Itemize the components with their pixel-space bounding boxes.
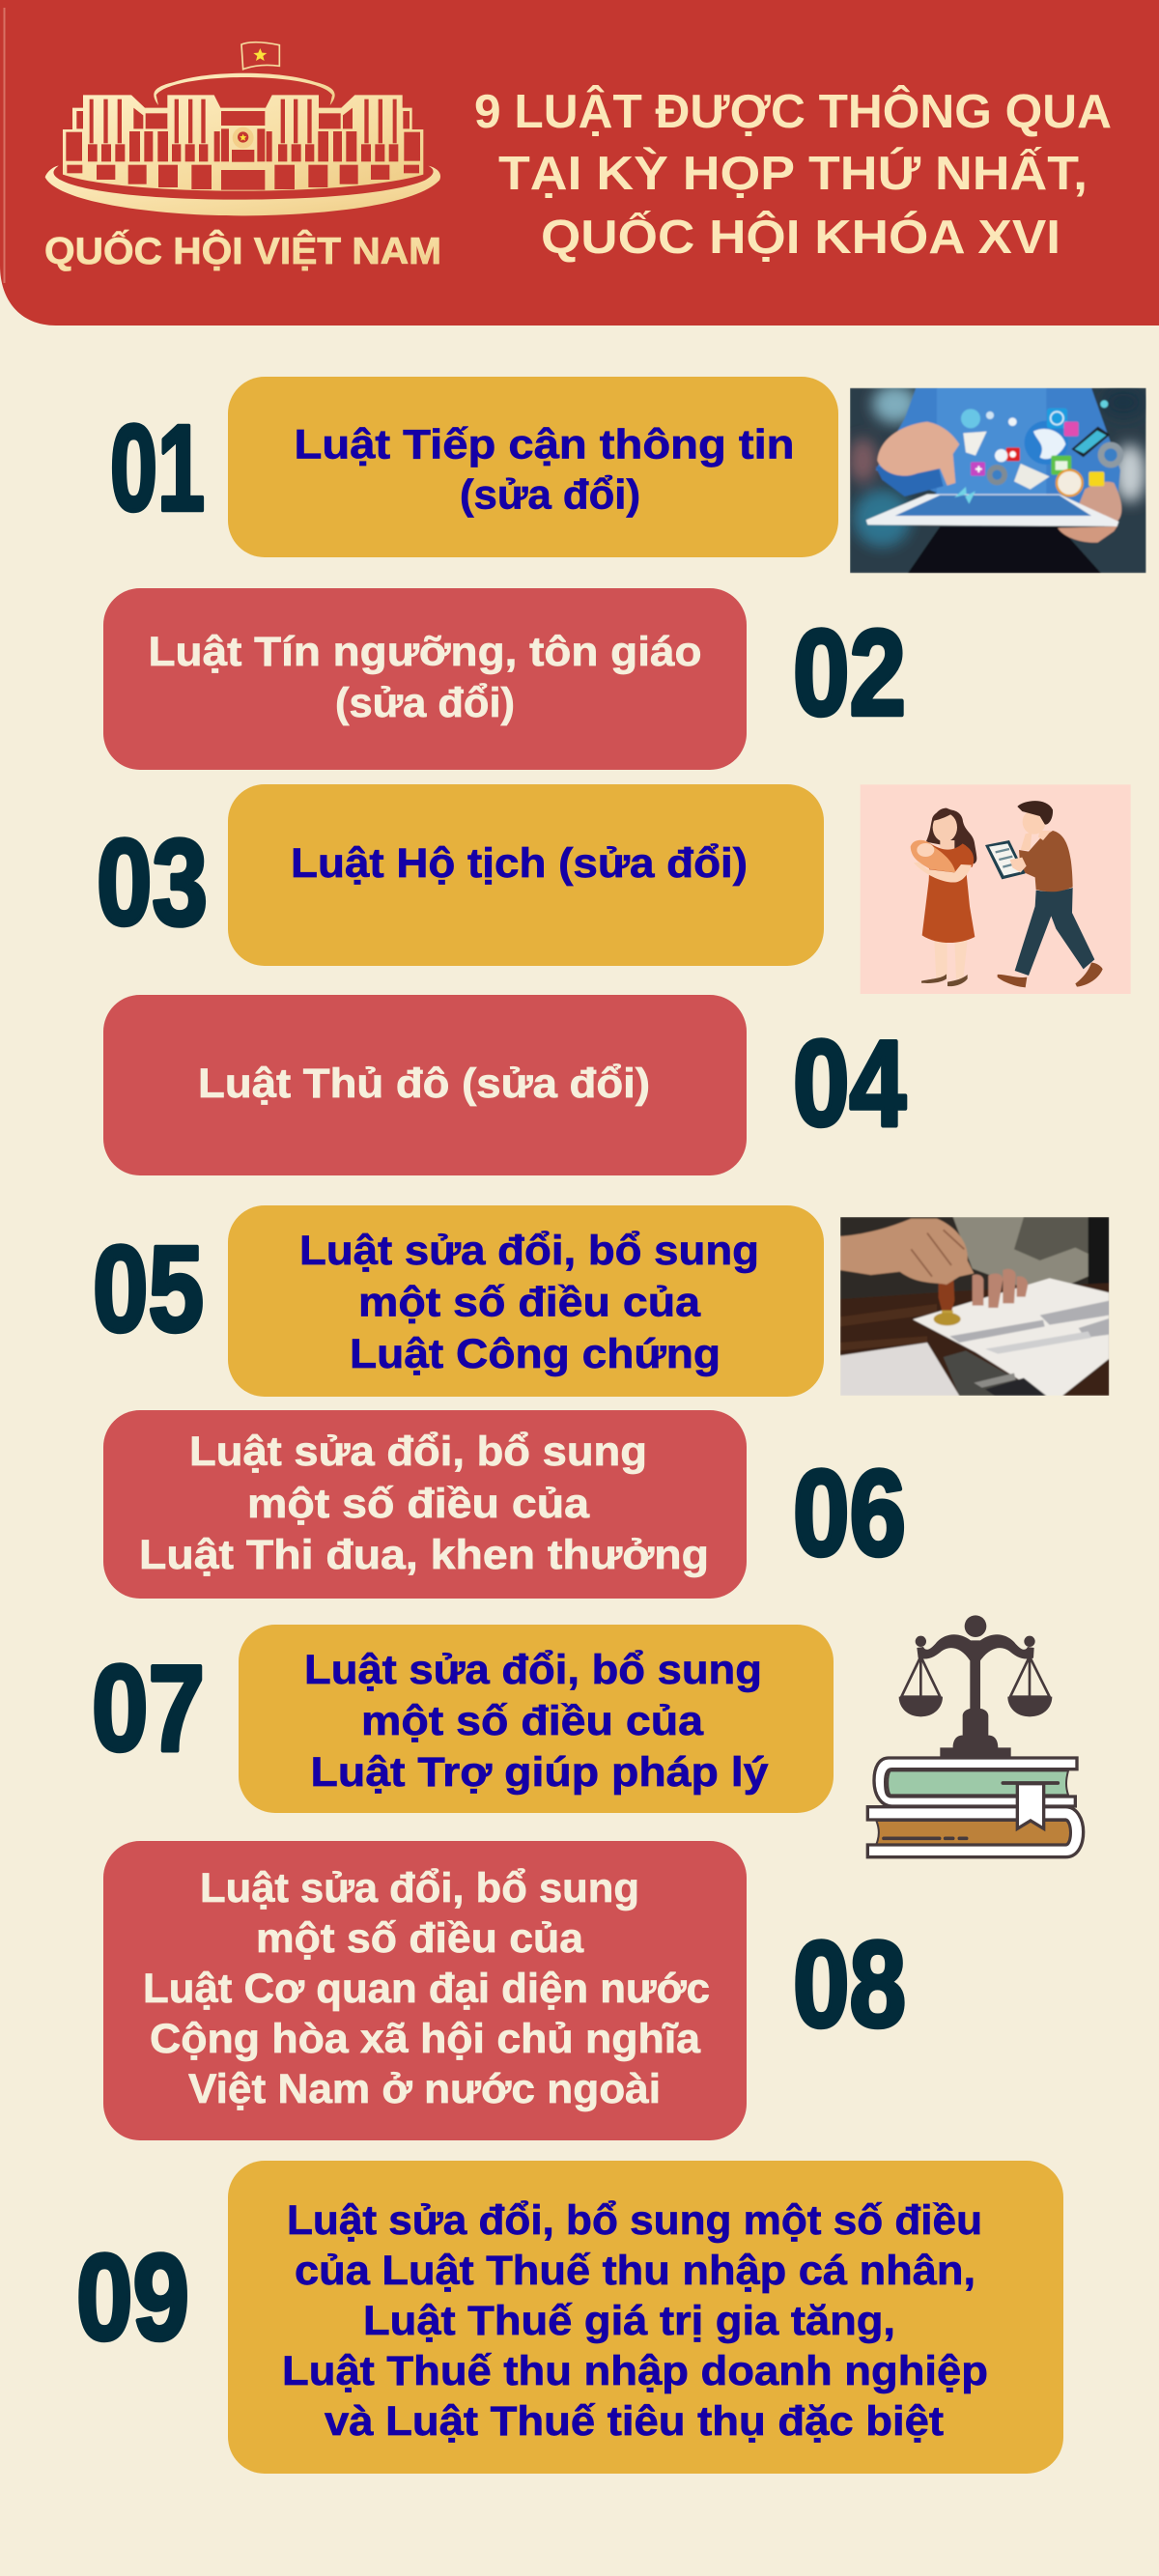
title: 9 LUẬT ĐƯỢC THÔNG QUA [474,85,1112,138]
number 05: 05 [93,1221,204,1357]
number 07: 07 [92,1640,205,1776]
panel: law 04 [103,995,747,1175]
panel: law 01: (sửa đổi) [460,471,640,518]
title: TẠI KỲ HỌP THỨ NHẤT, [498,147,1088,200]
logo: Quốc hội Việt Nam [44,42,441,272]
panel: law 08: Việt Nam ở nước ngoài [188,2066,661,2112]
number 06: 06 [793,1445,906,1581]
panel: law 03: Luật Hộ tịch (sửa đổi) [291,840,748,887]
panel: law 08: Luật sửa đổi, bổ sung [200,1865,639,1911]
panel: law 07: Luật sửa đổi, bổ sung [304,1647,762,1693]
panel: law 08: một số điều của [256,1915,584,1962]
item 04 [103,995,906,1175]
panel: law 07 [239,1625,834,1813]
panel: law 08 [103,1841,747,2140]
panel: law 08: Cộng hòa xã hội chủ nghĩa [150,2016,701,2062]
icon: scales of justice on books [867,1615,1084,1857]
panel: law 02: (sửa đổi) [335,680,515,726]
panel: law 07: Luật Trợ giúp pháp lý [311,1749,769,1796]
panel: law 06: một số điều của [247,1481,590,1527]
number 08: 08 [793,1916,906,2052]
number 01: 01 [110,400,205,536]
icon: parliament building [45,73,440,215]
logo text: QUỐC HỘI VIỆT NAM [44,229,441,272]
item 06 [103,1410,906,1599]
item 03 [97,784,1131,994]
panel: law 06 [103,1410,747,1599]
title [474,85,1112,264]
panel: law 05 [228,1205,824,1397]
item 01 [110,377,1146,573]
illustration: parents with baby and document [861,784,1131,994]
panel: law 02 [103,588,747,770]
panel: law 01 [228,377,838,557]
panel: header [0,0,1159,326]
item 08 [103,1841,906,2140]
title: QUỐC HỘI KHÓA XVI [541,211,1060,264]
panel: law 02: Luật Tín ngưỡng, tôn giáo [149,629,701,675]
photo: hands with tablet and app icons [848,384,1146,573]
photo: hand stamping a document [840,1217,1109,1396]
number 09: 09 [76,2229,189,2365]
panel: law 07: một số điều của [361,1698,704,1744]
item 09 [76,2161,1063,2474]
number 04: 04 [793,1015,906,1151]
item 02 [103,588,906,770]
panel: law 09: và Luật Thuế tiêu thụ đặc biệt [325,2398,944,2445]
panel: law 09: Luật sửa đổi, bổ sung một số điều [287,2197,982,2244]
panel: law 03 [228,784,824,966]
panel: law 09: Luật Thuế thu nhập doanh nghiệp [282,2348,988,2394]
number 03: 03 [97,814,208,950]
panel: law 05: Luật Công chứng [350,1331,721,1377]
panel: law 09: Luật Thuế giá trị gia tăng, [363,2298,895,2344]
item 07 [92,1615,1084,1857]
panel: law 04: Luật Thủ đô (sửa đổi) [198,1061,650,1107]
panel: law 06: Luật Thi đua, khen thưởng [139,1532,709,1578]
number 02: 02 [793,605,906,741]
panel: law 06: Luật sửa đổi, bổ sung [189,1429,647,1475]
item 05 [93,1205,1109,1397]
panel: law 05: Luật sửa đổi, bổ sung [299,1228,759,1274]
panel: law 09: của Luật Thuế thu nhập cá nhân, [295,2248,975,2294]
icon: flag [241,42,279,70]
panel: law 08: Luật Cơ quan đại diện nước [143,1966,710,2012]
panel: law 01: Luật Tiếp cận thông tin [294,421,794,467]
panel: law 09 [228,2161,1063,2474]
panel: law 05: một số điều của [358,1279,701,1325]
